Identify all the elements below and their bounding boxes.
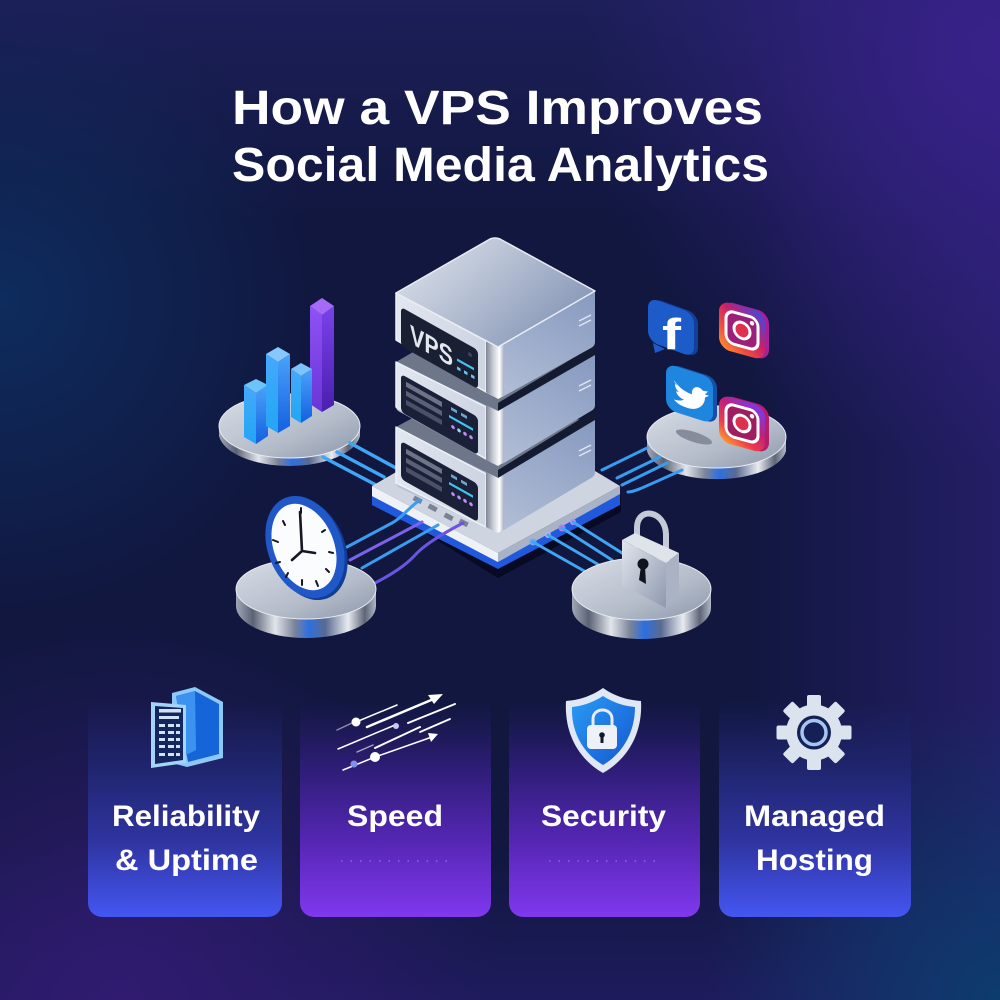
platform: social: [647, 406, 786, 479]
icon: clock: [251, 484, 362, 612]
bar 4: [310, 298, 334, 412]
server tier 3: [396, 410, 595, 533]
label: [744, 800, 885, 877]
wires: chart to base: [323, 443, 396, 485]
label: Managed: [744, 800, 885, 833]
title: Social Media Analytics: [232, 139, 769, 192]
icon: padlock: [622, 514, 679, 608]
vent: rack 1: [579, 315, 591, 326]
label: Hosting: [756, 844, 873, 877]
bar 2: [266, 347, 290, 433]
vent: rack 2: [579, 380, 591, 391]
icon: twitter: [666, 362, 717, 425]
card: reliability: [88, 687, 282, 917]
card: managed hosting: [719, 695, 911, 917]
icon: building: [151, 687, 223, 768]
wires: base to clock: [347, 500, 463, 583]
server base plate: [372, 471, 621, 578]
label: Reliability: [112, 800, 260, 833]
label: Security: [541, 800, 666, 833]
server tier 2: [396, 345, 595, 466]
panel: rack 3: [401, 441, 478, 522]
title: How a VPS Improves: [232, 82, 763, 135]
card: security: [509, 688, 700, 917]
title: [232, 82, 769, 192]
base ports: [413, 495, 576, 546]
server tier 1: [396, 238, 595, 399]
icon: instagram top: [719, 299, 769, 362]
icon: facebook: f: [662, 310, 681, 359]
icon: speed arrows: [337, 694, 455, 770]
icon: shield: [566, 688, 641, 773]
wires: social to base: [602, 448, 682, 492]
bar chart: [244, 298, 334, 444]
dotted divider: [549, 860, 657, 862]
isometric diagram: [219, 238, 786, 639]
vent: rack 3: [579, 445, 591, 456]
label: Speed: [347, 800, 443, 833]
panel: VPS label: VPS: [410, 320, 453, 374]
icon: instagram bottom: [719, 393, 769, 455]
label: [112, 800, 260, 877]
bar 1: [244, 379, 268, 444]
platform: lock: [572, 558, 711, 639]
card: speed: [300, 694, 491, 917]
panel: VPS label: [401, 307, 478, 389]
dotted divider: [341, 860, 450, 862]
wires: base to lock: [533, 522, 622, 572]
platform: chart: [219, 394, 360, 466]
platform: clock: [236, 559, 376, 638]
icon: facebook: [648, 296, 698, 359]
bar 3: [291, 363, 312, 423]
label: & Uptime: [115, 844, 258, 877]
panel: rack 2: [401, 374, 478, 455]
icon: gear: [776, 695, 852, 770]
